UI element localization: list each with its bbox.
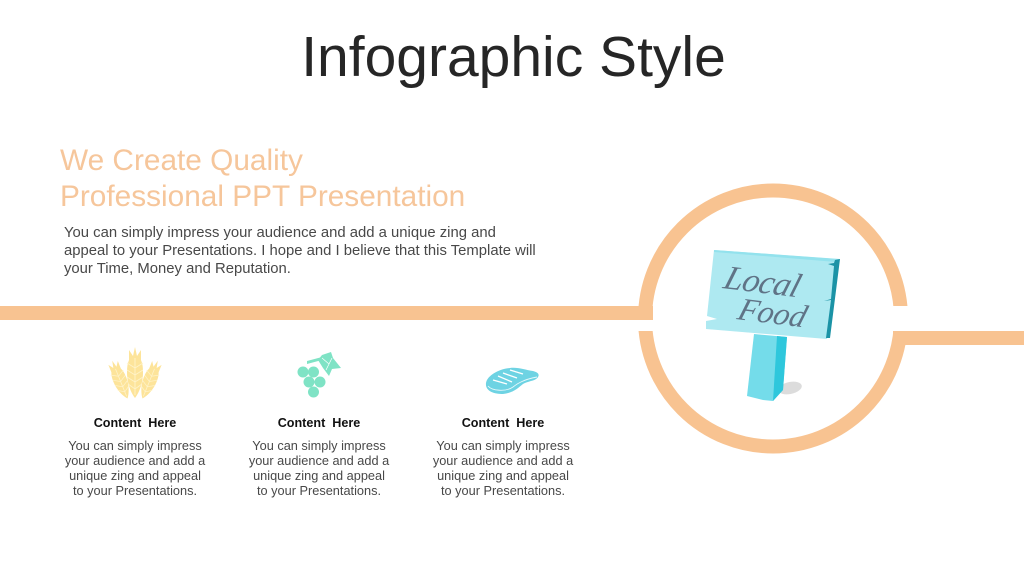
- column 2 text: to your Presentations.: [257, 483, 381, 498]
- column 1 text: to your Presentations.: [73, 483, 197, 498]
- icon: local food sign: [706, 250, 840, 401]
- icon: local food sign: Local: [719, 259, 805, 305]
- icon: local food sign: Food: [733, 291, 812, 334]
- title: Infographic Style: [301, 25, 726, 89]
- column 3 text: unique zing and appeal: [437, 468, 569, 483]
- column 2 heading: Content Here: [278, 416, 360, 430]
- subheading: [60, 144, 465, 213]
- column 1 text: your audience and add a: [65, 453, 205, 468]
- column 2 text: your audience and add a: [249, 453, 389, 468]
- intro text block: appeal to your Presentations. I hope and I believe that this Template will: [64, 243, 536, 259]
- column 3 text: your audience and add a: [433, 453, 573, 468]
- ring and connector graphic: [0, 184, 1024, 454]
- ring: [645, 190, 901, 446]
- column 3 heading: Content Here: [462, 416, 544, 430]
- column 1 text: [64, 438, 206, 498]
- column 2 text: You can simply impress: [252, 438, 386, 452]
- column 2 text: unique zing and appeal: [253, 468, 385, 483]
- column 1 text: You can simply impress: [68, 438, 202, 452]
- left connector bar: [0, 306, 653, 320]
- subheading: Professional PPT Presentation: [60, 180, 465, 213]
- column 2 text: [248, 438, 390, 498]
- subheading: We Create Quality: [60, 144, 303, 177]
- column 3: [432, 416, 574, 498]
- column 3 text: to your Presentations.: [441, 483, 565, 498]
- icon: grapes: [298, 352, 341, 398]
- intro text block: You can simply impress your audience and add a unique zing and: [64, 225, 496, 241]
- icon: wheat: [106, 347, 164, 401]
- intro text block: [64, 225, 536, 277]
- intro text block: your Time, Money and Reputation.: [64, 261, 291, 277]
- column 3 text: [432, 438, 574, 498]
- column 2: [248, 416, 390, 498]
- icon: steak: [486, 368, 539, 394]
- right connector bar: [893, 331, 1024, 345]
- column 1 heading: Content Here: [94, 416, 176, 430]
- column 3 text: You can simply impress: [436, 438, 570, 452]
- column 1: [64, 416, 206, 498]
- column 1 text: unique zing and appeal: [69, 468, 201, 483]
